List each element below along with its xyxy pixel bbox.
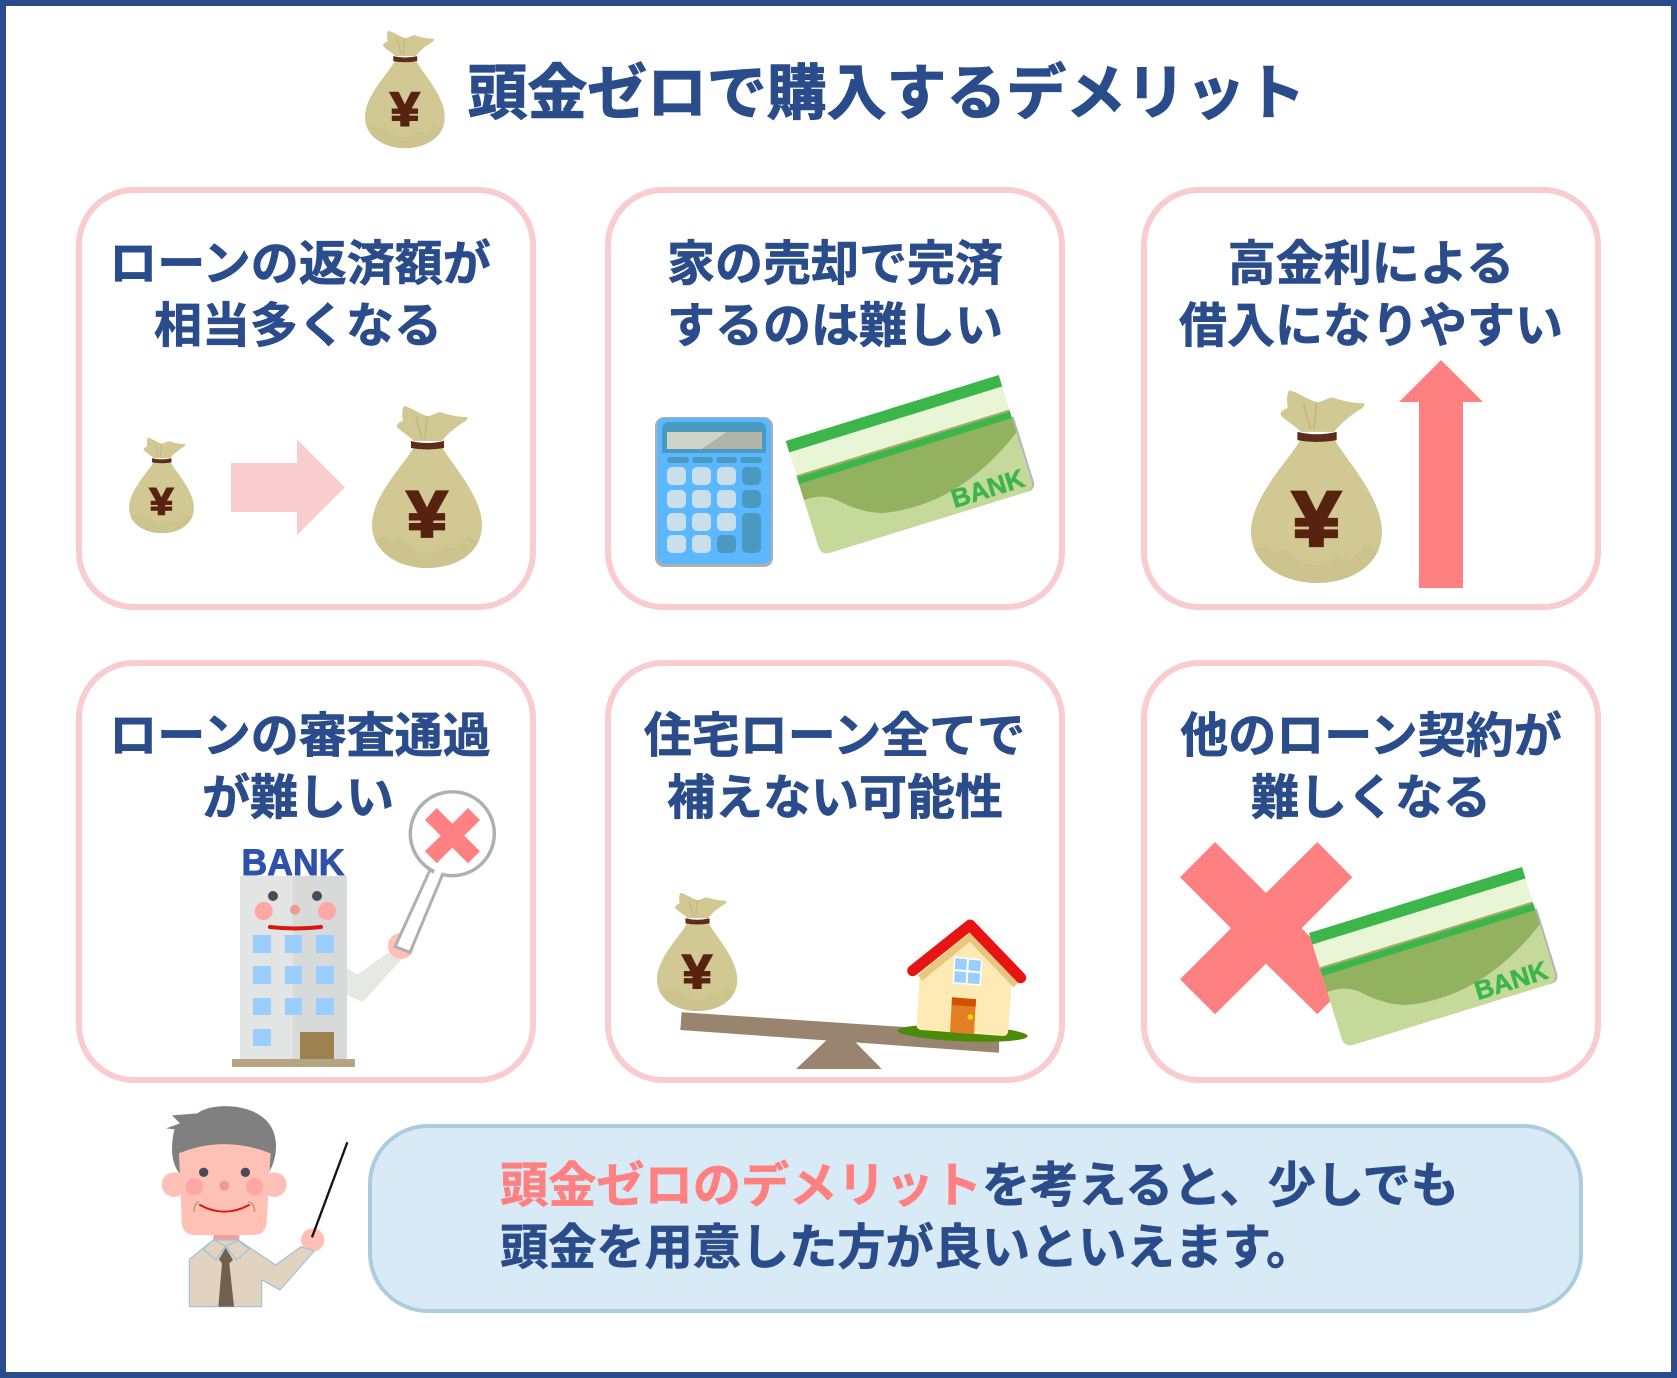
icon: small money bag	[128, 438, 195, 537]
callout text: 頭金を用意した方が良いといえます。	[500, 1221, 1314, 1275]
panel heading: 高金利による	[1228, 238, 1514, 291]
panel: hard to repay by selling	[608, 190, 1062, 607]
icon: bank building with rejection sign: BANK	[242, 842, 345, 883]
icon: teacher with pointer	[162, 1106, 347, 1307]
icon: money bag: ¥	[683, 945, 712, 998]
icon: bank card	[786, 374, 1036, 556]
icon: bank card: BANK	[947, 463, 1028, 514]
arrow: up	[1399, 360, 1483, 588]
panel: larger repayments	[79, 190, 533, 607]
icon: large money bag: ¥	[407, 478, 447, 551]
panel: other loans become hard	[1144, 663, 1598, 1080]
panel heading: ローンの返済額が	[109, 238, 491, 291]
icon: seesaw	[680, 1012, 999, 1069]
arrow: right	[231, 439, 345, 535]
panel: high interest	[1144, 190, 1598, 607]
icon: large money bag	[370, 406, 484, 575]
panel heading: 家の売却で完済	[667, 238, 1003, 291]
heading: 頭金ゼロで購入するデメリット	[468, 60, 1306, 127]
icon: money bag	[656, 893, 739, 1016]
icon: cross mark	[1180, 842, 1352, 1014]
panel: may not cover everything	[608, 663, 1062, 1080]
icon: bank card: BANK	[1471, 955, 1552, 1006]
icon: money bag	[1249, 390, 1384, 591]
icon: small money bag: ¥	[150, 480, 174, 523]
title	[364, 31, 1306, 153]
icon: money bag: ¥	[1293, 476, 1340, 563]
panel heading: 補えない可能性	[667, 772, 1003, 825]
callout text: を考えると、少しでも	[982, 1159, 1459, 1213]
panel: hard to pass screening	[79, 663, 533, 1080]
panel heading: 難しくなる	[1251, 772, 1491, 825]
icon: money bag: ¥	[390, 83, 420, 136]
icon: money bag	[364, 31, 446, 153]
icon: house	[897, 925, 1028, 1044]
icon: calculator	[655, 417, 773, 567]
panel heading: 住宅ローン全てで	[644, 710, 1025, 763]
panel heading: 他のローン契約が	[1180, 710, 1562, 763]
panel heading: 相当多くなる	[154, 300, 442, 353]
panel heading: ローンの審査通過	[109, 710, 491, 763]
panel heading: が難しい	[202, 772, 394, 825]
callout	[370, 1126, 1581, 1311]
icon: bank building with rejection sign	[232, 792, 494, 1067]
panel heading: するのは難しい	[667, 300, 1003, 353]
icon: bank card	[1309, 866, 1559, 1048]
panel heading: 借入になりやすい	[1179, 300, 1563, 353]
callout text: 頭金ゼロのデメリット	[500, 1159, 982, 1213]
